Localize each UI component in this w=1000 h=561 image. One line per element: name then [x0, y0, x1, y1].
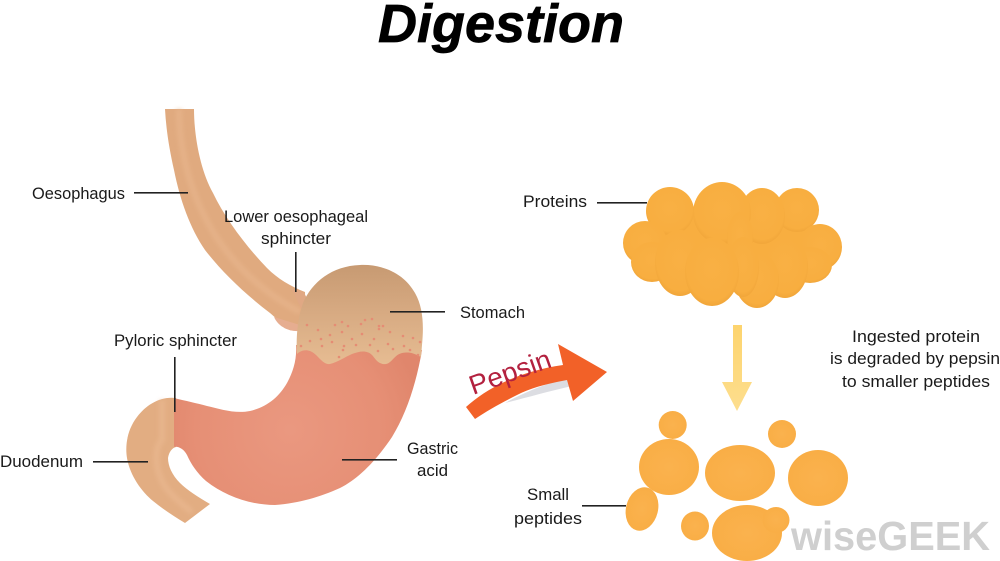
label: oesophagus: Oesophagus [32, 185, 125, 203]
label: proteins [523, 193, 647, 211]
label: small peptides: peptides [514, 510, 582, 528]
lower oesophageal sphincter [274, 290, 308, 331]
stomach acid dots [300, 318, 421, 358]
label: pyloric sphincter [114, 332, 238, 412]
pepsin label: Pepsin [465, 344, 555, 401]
label: duodenum: Duodenum [0, 453, 83, 471]
label: proteins: Proteins [523, 193, 587, 211]
label: stomach: Stomach [460, 304, 525, 322]
label: small peptides [514, 486, 626, 528]
label: small peptides: Small [527, 486, 569, 504]
label: lower oesophageal sphincter: Lower oesophageal [224, 208, 368, 226]
pepsin arrow [465, 344, 607, 419]
description text [830, 328, 1000, 391]
label: gastric acid: Gastric [407, 440, 458, 458]
label: lower oesophageal sphincter: sphincter [261, 230, 332, 248]
label: pyloric sphincter: Pyloric sphincter [114, 332, 238, 350]
duodenum [126, 398, 210, 523]
description text: is degraded by pepsin [830, 350, 1000, 368]
gastric acid region [174, 345, 422, 505]
label: gastric acid [342, 440, 458, 480]
small peptides [621, 411, 848, 561]
description text: to smaller peptides [842, 373, 990, 391]
description text: Ingested protein [852, 328, 980, 346]
label: gastric acid: acid [417, 462, 448, 480]
label: lower oesophageal sphincter [224, 208, 368, 292]
watermark: wiseGEEK [790, 513, 990, 559]
stomach illustration [126, 109, 423, 523]
yellow down arrow [722, 325, 752, 411]
oesophagus [165, 109, 306, 333]
label: stomach [390, 304, 525, 322]
stomach fundus [297, 265, 423, 364]
protein cluster [623, 182, 842, 308]
